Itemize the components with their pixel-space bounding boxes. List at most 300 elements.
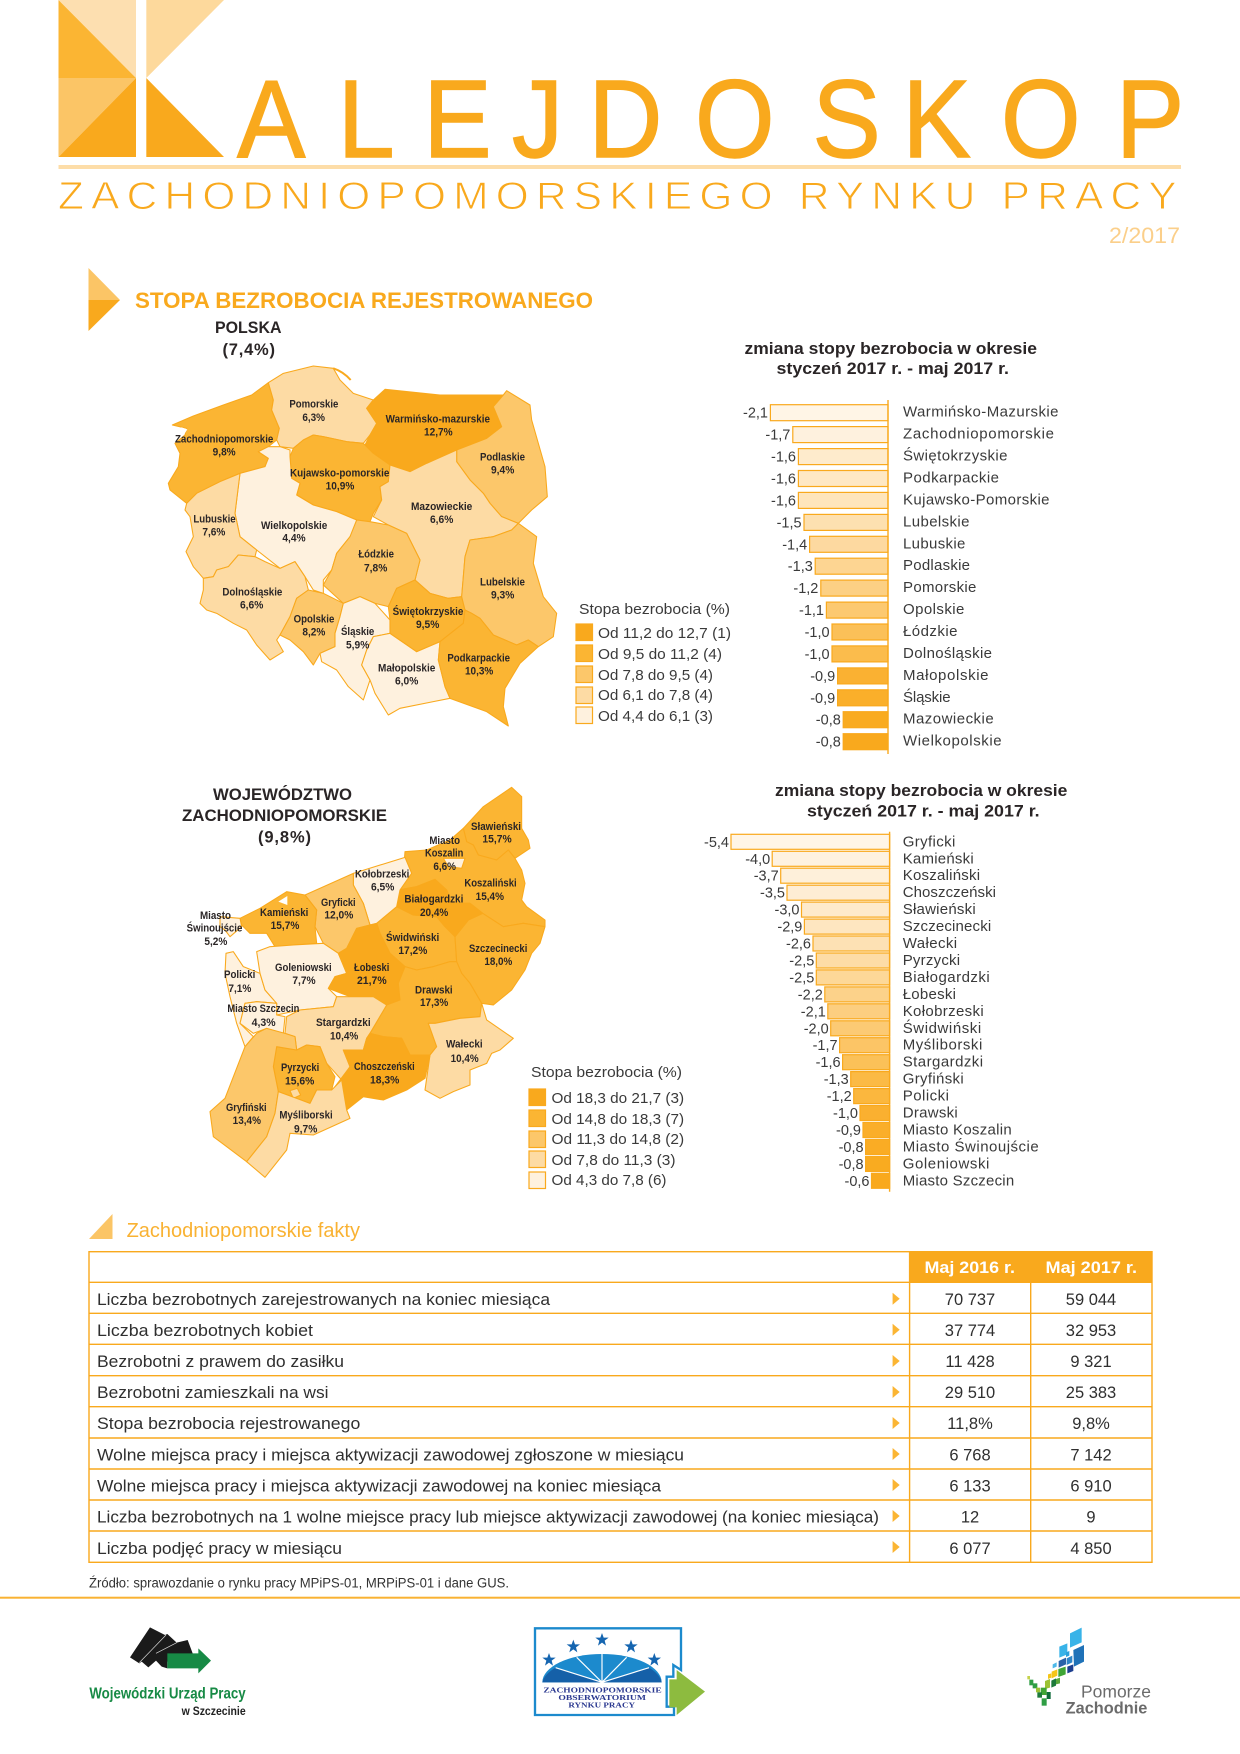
bar: Sławieński [774,901,976,919]
bar: Świętokrzyskie: Świętokrzyskie [903,447,1008,465]
bar: Choszczeński: Choszczeński [903,884,996,901]
map labels: 5,2% [204,936,228,948]
bar: Miasto Szczecin: -0,6 [844,1174,870,1190]
logo: Pomorze Zachodnie [1027,1628,1151,1718]
chart heading: Zachodniopomorskie: styczeń 2017 r. - maj 2017 r. [807,803,1040,821]
row: jobs taken [97,1539,1112,1558]
bar: Białogardzki: Białogardzki [903,969,990,986]
map labels: 9,3% [491,590,515,602]
region: Policki [225,952,277,1047]
bar: Koszaliński: Koszaliński [903,867,980,884]
map labels [175,399,525,688]
bar: Gryfiński: Gryfiński [903,1071,964,1088]
region: Gryfiński [210,1028,297,1162]
map: Zachodniopomorskie [187,787,545,1177]
map labels: Miasto Szczecin [227,1003,300,1015]
map labels: Kamieński [260,907,308,919]
legend: Poland: Od 11,2 do 12,7 (1) [598,625,731,642]
bar: Lubelskie [777,513,970,531]
bar: Gryficki [704,833,955,851]
bar: Miasto Świnoujście: -0,8 [839,1140,864,1156]
row: unemployed per vacancy: Liczba bezrobotnych na 1 wolne miejsce pracy lub miejsce aktywizacji zawodowej (na koniec miesiąca) [97,1507,879,1526]
map labels: 12,0% [324,910,354,922]
region: Kołobrzeski [353,857,412,925]
icon: facts triangle [89,1214,112,1239]
map labels: Łobeski [354,962,389,974]
bar: Warmińsko-Mazurskie: Warmińsko-Mazurskie [903,404,1058,421]
map labels: Świnoujście [187,922,242,935]
bar: Warmińsko-Mazurskie [743,404,1058,422]
bar: Drawski [833,1104,958,1122]
map labels: Miasto [429,835,460,847]
legend: Poland: Od 9,5 do 11,2 (4) [598,646,722,663]
table header: Maj 2017 r. [1046,1258,1137,1277]
map labels: Gryfiński [226,1102,267,1114]
region: Gryficki [305,873,370,953]
table: facts [89,1252,1152,1562]
chart heading: Poland [744,340,1037,378]
bar: Śląskie [810,688,951,707]
map labels: Pyrzycki [281,1062,319,1074]
chart heading: Zachodniopomorskie [775,782,1067,821]
row: benefit entitled [97,1352,1112,1371]
frame [535,1628,681,1715]
region: Wielkopolskie [235,447,363,593]
row: registered unemployed: Liczba bezrobotnych zarejestrowanych na koniec miesiąca [97,1290,551,1309]
region: Goleniowski [257,943,347,1015]
bar: Pyrzycki: -2,5 [789,954,814,970]
bar: Opolskie [799,601,964,619]
table header [910,1252,1152,1282]
map labels: 10,9% [326,481,355,493]
bar chart: Poland [743,400,1058,754]
bar: Zachodniopomorskie [765,426,1054,444]
map labels: 15,4% [476,891,504,903]
icon: pixel check mark [1027,1628,1084,1706]
map labels: Lubelskie [480,577,525,589]
bar: Kołobrzeski: -2,1 [801,1004,826,1020]
chart heading: Poland: styczeń 2017 r. - maj 2017 r. [776,360,1009,378]
bar: Łobeski: -2,2 [798,987,823,1003]
row: registered unemployed: 70 737 [945,1291,995,1309]
logo: Wojewódzki Urząd Pracy: Wojewódzki Urząd Pracy [89,1685,246,1702]
bar: Pomorskie: -1,2 [793,581,818,597]
bar: Gryfiński [824,1071,964,1088]
map labels: Choszczeński [354,1061,415,1073]
bar: Kujawsko-Pomorskie [771,491,1050,509]
bar: Pomorskie [793,579,976,597]
bar: Miasto Świnoujście [839,1137,1039,1156]
map labels: Małopolskie [378,663,435,675]
legend: Zachodniopomorskie: Stopa bezrobocia (%) [531,1064,682,1081]
map labels: Drawski [415,984,453,996]
lake: Kamieński coast [278,896,287,905]
region: Łódzkie [323,520,420,607]
bar: Świdwiński: -2,0 [804,1021,829,1037]
bar: Wałecki: Wałecki [903,935,957,952]
map labels: 6,3% [302,412,325,424]
legend: Poland [576,601,731,725]
bar: Drawski: Drawski [903,1104,958,1122]
row: unemployed per vacancy: 12 [961,1508,979,1526]
region: Opolskie [280,590,343,665]
region: Zachodniopomorskie [168,383,279,503]
heading: Polska: (7,4%) [222,341,275,359]
logo: Wojewódzki Urząd Pracy [89,1627,246,1718]
heading: Województwo Zachodniopomorskie [182,785,387,847]
row: unemployment rate [97,1414,1110,1433]
bar: Małopolskie [810,667,988,685]
row: vacancies at month end [97,1476,1112,1496]
bar: Dolnośląskie: Dolnośląskie [903,645,992,662]
row: unemployment rate: Stopa bezrobocia rejestrowanego [97,1414,360,1433]
bar: Goleniowski: -0,8 [839,1157,864,1173]
row: vacancies at month end: 6 910 [1070,1477,1112,1495]
map labels: Koszaliński [464,878,517,890]
legend: Zachodniopomorskie [529,1064,684,1189]
map labels: Wielkopolskie [261,520,327,532]
bar: Opolskie: -1,1 [799,603,824,619]
map labels: Dolnośląskie [222,587,282,599]
bar: Sławieński: Sławieński [903,901,976,918]
bar: Miasto Szczecin: Miasto Szczecin [903,1172,1014,1189]
legend: Zachodniopomorskie: Od 4,3 do 7,8 (6) [552,1172,666,1189]
facts heading [89,1214,360,1242]
row: unemployment rate: 9,8% [1072,1415,1110,1433]
map labels: 8,2% [302,627,326,639]
bar: Zachodniopomorskie: -1,7 [765,428,790,444]
icon: green arrow [669,1670,705,1715]
bar: Drawski: -1,0 [833,1106,858,1122]
patch: Pyrzyce enclave [290,1088,301,1098]
map labels: 18,0% [484,956,513,968]
bar: Gryficki: Gryficki [903,833,955,850]
region: Drawski [370,962,482,1055]
map labels: Podlaskie [480,452,525,464]
map labels: Koszalin [425,848,464,860]
map labels: Sławieński [471,821,521,833]
map labels: 6,0% [395,676,419,688]
region: Pomorskie [268,366,377,448]
row: unemployed per vacancy: 9 [1086,1508,1096,1526]
map labels: 7,7% [292,975,316,987]
map labels: 13,4% [233,1115,261,1127]
map labels: Szczecinecki [469,943,527,955]
map labels: Białogardzki [404,894,463,906]
bar: Policki: Policki [903,1088,949,1105]
bar: Łódzkie [805,623,958,641]
table header: Maj 2016 r. [924,1258,1015,1277]
footer rule [0,1597,1240,1599]
bar: Śląskie: -0,9 [810,691,835,707]
map labels: 15,7% [271,920,300,932]
row: vacancies reported [97,1446,1112,1464]
bar: Podkarpackie: Podkarpackie [903,470,999,486]
map labels: 17,3% [420,997,449,1009]
bar: Pyrzycki: Pyrzycki [903,952,960,969]
map labels: 15,6% [285,1075,315,1087]
map labels: 9,5% [416,619,440,631]
row: unemployed women: 32 953 [1066,1322,1116,1340]
chart heading: Zachodniopomorskie: zmiana stopy bezrobocia w okresie [775,782,1067,800]
bar: Świdwiński: Świdwiński [903,1019,981,1037]
heading: Województwo Zachodniopomorskie: ZACHODNIOPOMORSKIE [182,807,387,825]
row: rural unemployed [97,1383,1116,1402]
region: Podlaskie [457,391,547,523]
region: Podkarpackie [438,610,538,726]
region: Kamieński [240,892,317,947]
bar: Lubuskie [782,535,965,553]
bar: Podlaskie [788,557,970,575]
bar chart: Zachodniopomorskie [704,832,1039,1192]
legend: Zachodniopomorskie: Od 11,3 do 14,8 (2) [552,1131,684,1148]
map labels: Gryficki [321,897,356,909]
icon: stars [542,1633,661,1666]
bar: Kujawsko-Pomorskie: -1,6 [771,493,796,509]
bar: Sławieński: -3,0 [774,903,800,919]
row: registered unemployed [97,1290,1116,1309]
region: Lubuskie [185,473,257,578]
bar: Świętokrzyskie: -1,6 [771,450,796,466]
logo: Wojewódzki Urząd Pracy: w Szczecinie [181,1704,246,1718]
row: vacancies reported: 6 768 [949,1446,991,1464]
bar: Wielkopolskie: -0,8 [816,735,841,751]
row: unemployed women [97,1321,1116,1340]
map labels: 21,7% [357,975,387,987]
bar: Mazowieckie: Mazowieckie [903,711,994,728]
icon: black cards and green arrow [130,1627,211,1673]
source note: Źródło: sprawozdanie o rynku pracy MPiPS-01, MRPiPS-01 i dane GUS. [89,1576,509,1591]
region: Miasto Szczecin [240,1002,285,1033]
masthead [58,0,1184,248]
bar: Łódzkie: Łódzkie [903,623,958,640]
region: Warmińsko-mazurskie [365,389,503,472]
bar: Kamieński: -4,0 [745,852,770,868]
subtitle: ZACHODNIOPOMORSKIEGO RYNKU PRACY [58,174,1177,218]
map labels: 10,3% [465,666,494,678]
row: jobs taken: 4 850 [1070,1540,1112,1558]
region: Choszczeński [335,1033,430,1110]
region: Pyrzycki [273,1045,335,1103]
section heading [88,268,593,331]
map labels: 7,6% [202,527,226,539]
bar: Goleniowski [839,1155,989,1173]
legend: Poland: Od 6,1 do 7,8 (4) [598,687,713,704]
logo: Zachodniopomorskie Obserwatorium Rynku Pracy: OBSERWATORIUM [558,1693,646,1702]
row: vacancies at month end: 6 133 [949,1477,991,1495]
icon: kaleidoscope K [58,0,224,157]
bar: Dolnośląskie [805,645,992,663]
bar: Choszczeński: -3,5 [760,886,785,902]
region: Stargardzki [285,997,387,1080]
map labels: Miasto [200,910,231,922]
map labels: 17,2% [398,945,428,957]
bar: Miasto Świnoujście: Miasto Świnoujście [903,1137,1039,1155]
row: rural unemployed: 25 383 [1066,1384,1116,1402]
logo: Zachodniopomorskie Obserwatorium Rynku Pracy [535,1628,705,1715]
icon: section arrow [88,268,120,331]
map labels: Warmińsko-mazurskie [386,414,490,426]
map labels: 4,3% [252,1017,276,1029]
title underline [58,165,1181,169]
region: Sławieński [463,787,530,860]
bar: Podlaskie: Podlaskie [903,557,970,574]
bar: Świdwiński [804,1019,981,1037]
row: benefit entitled: 11 428 [945,1353,995,1371]
map labels: 7,1% [228,983,252,995]
bar: Gryficki: -5,4 [704,835,729,851]
bar: Policki: -1,2 [827,1089,852,1105]
bar: Zachodniopomorskie: Zachodniopomorskie [903,426,1054,443]
chart heading: Poland: zmiana stopy bezrobocia w okresie [744,340,1037,358]
map labels: 6,6% [433,861,456,873]
bar: Opolskie: Opolskie [903,601,964,618]
region: Koszaliński [398,828,545,927]
facts title: Zachodniopomorskie fakty [127,1220,360,1242]
section title: STOPA BEZROBOCIA REJESTROWANEGO [135,288,593,313]
bar: Lubuskie: Lubuskie [903,535,965,552]
map labels: Goleniowski [275,962,332,974]
map labels: Kujawsko-pomorskie [290,468,389,480]
map labels: 6,6% [430,514,454,526]
bar: Lubuskie: -1,4 [782,537,807,553]
map labels: Wałecki [446,1039,483,1051]
legend: Zachodniopomorskie: Od 7,8 do 11,3 (3) [552,1152,676,1169]
heading: Województwo Zachodniopomorskie: (9,8%) [258,829,311,847]
bar: Szczecinecki: Szczecinecki [903,918,991,935]
bar: Łobeski: Łobeski [903,986,956,1003]
issue number: 2/2017 [1109,223,1180,248]
region: Kujawsko-pomorskie [290,435,390,522]
map labels: 9,4% [491,465,515,477]
bar: Choszczeński [760,884,996,902]
map labels: 12,7% [424,427,453,439]
heading: Województwo Zachodniopomorskie: WOJEWÓDZTWO [213,785,352,804]
Hel peninsula [333,368,351,380]
bar: Małopolskie: Małopolskie [903,667,988,684]
region: Lubelskie [462,523,557,647]
row: unemployment rate: 11,8% [947,1415,993,1433]
map labels: Zachodniopomorskie [175,434,273,446]
logo: Pomorze Zachodnie: Zachodnie [1066,1699,1147,1718]
map labels: Lubuskie [193,514,236,526]
row: unemployed women: 37 774 [945,1322,995,1340]
row: jobs taken: Liczba podjęć pracy w miesiącu [97,1539,342,1558]
row: rural unemployed: Bezrobotni zamieszkali na wsi [97,1383,328,1402]
map labels: Policki [224,969,255,981]
region: Białogardzki [397,879,483,937]
map labels: Stargardzki [316,1017,371,1029]
bar: Szczecinecki [777,918,991,936]
bar: Kujawsko-Pomorskie: Kujawsko-Pomorskie [903,491,1050,508]
bar: Pomorskie: Pomorskie [903,579,976,596]
map labels: Podkarpackie [447,653,510,665]
row: vacancies at month end: Wolne miejsca pracy i miejsca aktywizacji zawodowej na koniec miesiąca [97,1476,662,1495]
logo: Pomorze Zachodnie: Pomorze [1081,1682,1151,1702]
bar: Kamieński [745,850,974,868]
bar: Podlaskie: -1,3 [788,559,813,575]
row: rural unemployed: 29 510 [945,1384,995,1402]
region: Myśliborski [247,1080,350,1177]
bar: Białogardzki [789,969,990,986]
bar: Miasto Koszalin [836,1122,1012,1139]
bar: Myśliborski [813,1037,982,1054]
bar: Pyrzycki [789,952,960,970]
map labels: 5,9% [346,640,370,652]
row: registered unemployed: 59 044 [1066,1291,1116,1309]
map labels: Kołobrzeski [355,869,409,881]
bar: Lubelskie: -1,5 [777,515,802,531]
bar: Lubelskie: Lubelskie [903,513,970,530]
bar: Goleniowski: Goleniowski [903,1155,989,1172]
heading: Polska: POLSKA [215,319,282,337]
region: Śląskie [320,597,390,700]
region: Miasto Świnoujście [220,917,242,937]
legend: Zachodniopomorskie: Od 18,3 do 21,7 (3) [552,1090,684,1107]
bar: Kamieński: Kamieński [903,850,974,867]
row: jobs taken: 6 077 [949,1540,991,1558]
bar: Wielkopolskie: Wielkopolskie [903,733,1002,750]
bar: Wałecki [786,935,957,952]
bar: Kołobrzeski [801,1003,984,1020]
bar: Małopolskie: -0,9 [810,669,835,685]
bar: Stargardzki [816,1054,983,1071]
region: Szczecinecki [455,913,545,1005]
bar: Koszaliński [754,867,980,885]
bar: Miasto Koszalin: Miasto Koszalin [903,1122,1012,1138]
map labels: 7,8% [364,563,388,575]
map labels: 4,4% [282,533,306,545]
bar: Miasto Szczecin [844,1172,1014,1190]
bar: Gryfiński: -1,3 [824,1072,849,1088]
map labels: Pomorskie [289,399,338,411]
bar: Myśliborski: Myśliborski [903,1037,982,1054]
bar: Łódzkie: -1,0 [805,625,830,641]
bar: Wielkopolskie [816,733,1002,751]
logo: Zachodniopomorskie Obserwatorium Rynku Pracy: RYNKU PRACY [568,1700,636,1709]
map labels: Myśliborski [279,1110,333,1122]
bar: Świętokrzyskie [771,447,1008,466]
region: Świętokrzyskie [388,580,465,652]
region: Miasto Koszalin [443,858,465,868]
region: Małopolskie [362,633,450,715]
bar: Podkarpackie [771,470,999,488]
title: ALEJDOSKOP [237,58,1184,181]
bar: Mazowieckie: -0,8 [816,713,841,729]
bar: Warmińsko-Mazurskie: -2,1 [743,406,768,422]
heading: Polska [215,319,282,359]
map labels: 6,5% [371,882,395,894]
bar: Policki [827,1088,949,1105]
bar: Stargardzki: Stargardzki [903,1054,983,1071]
map: Poland [168,366,557,726]
legend: Poland: Od 4,4 do 6,1 (3) [598,708,713,725]
bar: Szczecinecki: -2,9 [777,920,802,936]
bar: Wałecki: -2,6 [786,936,811,952]
bar: Dolnośląskie: -1,0 [805,647,830,663]
region: Dolnośląskie [200,555,308,660]
row: benefit entitled: 9 321 [1070,1353,1112,1371]
map labels: 10,4% [330,1030,359,1042]
map labels: Świdwiński [386,931,439,944]
map labels: Łódzkie [358,549,394,561]
legend: Zachodniopomorskie: Od 14,8 do 18,3 (7) [552,1111,684,1128]
map labels: Świętokrzyskie [393,605,463,618]
map labels: 20,4% [420,907,449,919]
map labels: Opolskie [294,614,334,626]
legend: Poland: Stopa bezrobocia (%) [579,601,730,618]
region: Świdwiński [377,907,457,970]
